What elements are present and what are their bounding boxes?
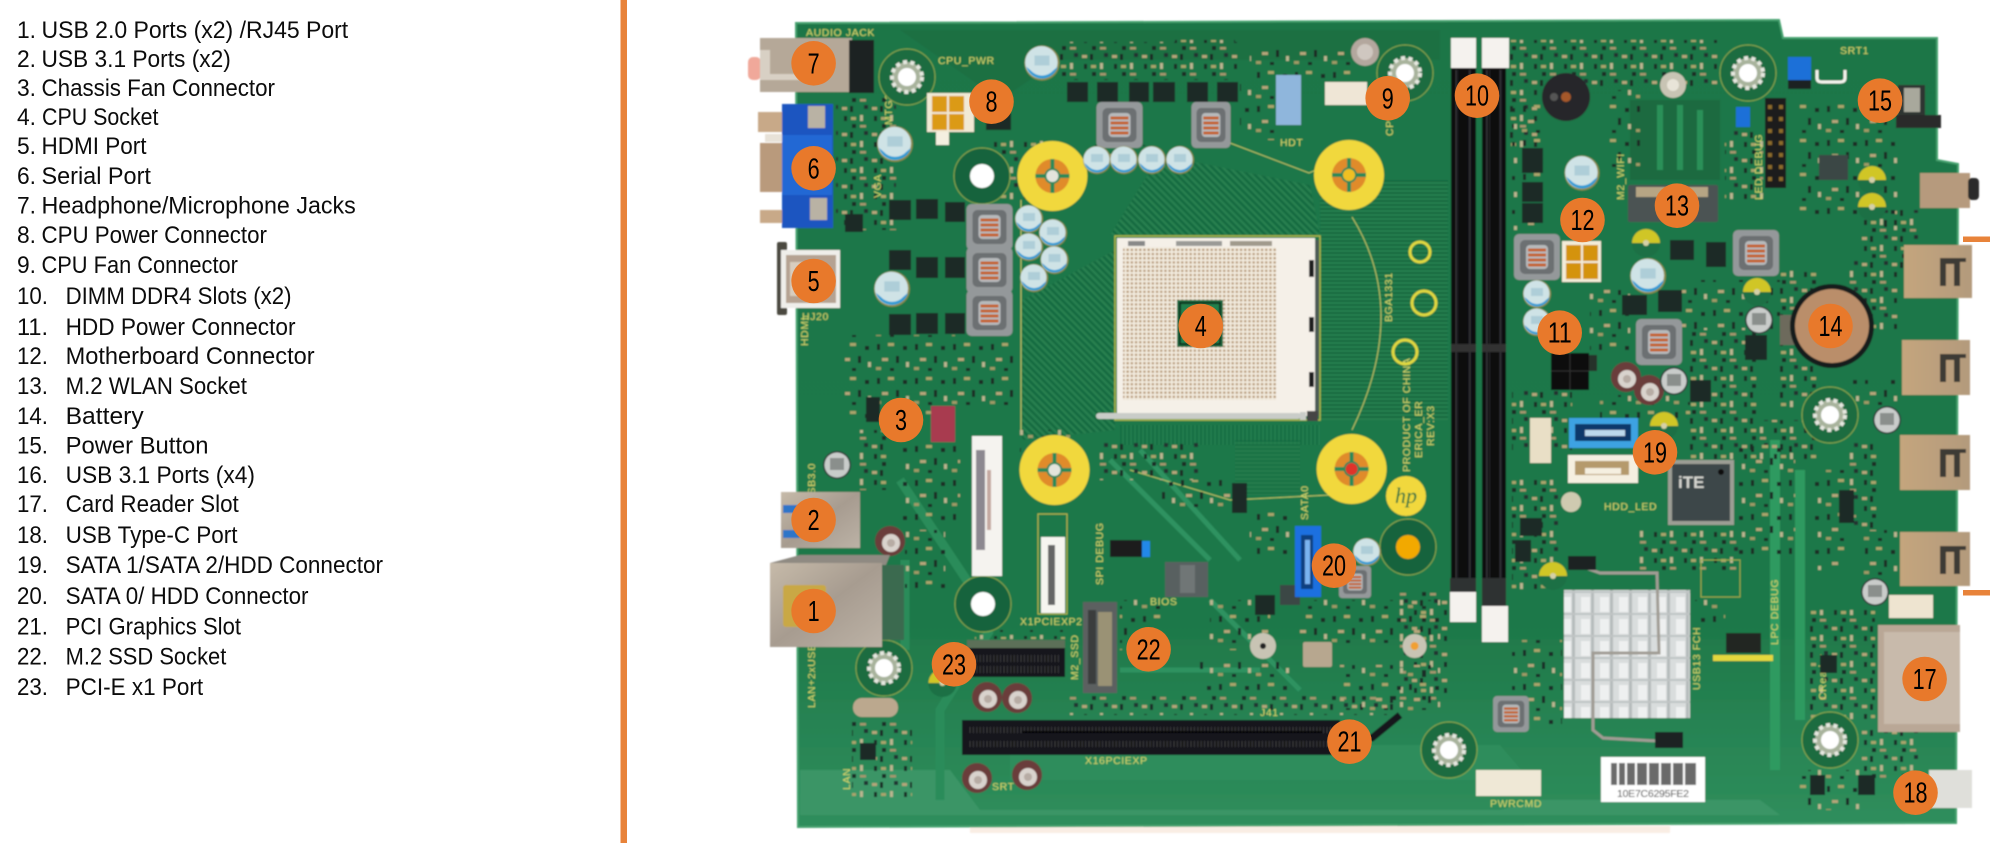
marker 9: 9 <box>1382 83 1394 115</box>
marker 9 <box>1365 76 1410 121</box>
silkscreen labels: HJ20 <box>802 311 829 323</box>
component 5 HDMI port <box>777 242 840 315</box>
silkscreen labels: HDMI <box>799 317 811 346</box>
marker 13: 13 <box>1665 191 1689 223</box>
marker 8: 8 <box>986 87 998 119</box>
marker 17: 17 <box>1913 664 1937 696</box>
marker 2 <box>791 498 836 542</box>
silkscreen labels: J41 <box>1260 707 1279 719</box>
list item 15: Power Button <box>66 432 208 460</box>
silkscreen labels: CPU_PWR <box>938 55 995 67</box>
PCB copper regions and traces <box>800 30 1800 815</box>
list item 16: USB 3.1 Ports (x4) <box>66 462 255 489</box>
component 12 motherboard connector <box>1562 241 1601 282</box>
marker 12 <box>1560 198 1605 242</box>
mounting holes <box>856 45 1858 778</box>
MAC barcode label: 10E7C6295FE2 <box>1617 788 1689 800</box>
marker 10 <box>1455 73 1499 118</box>
silkscreen labels: LAN <box>841 768 853 790</box>
list item 14: 14. <box>17 403 48 430</box>
silkscreen labels: PWRCMD <box>1490 798 1542 810</box>
marker 5: 5 <box>808 266 820 298</box>
marker 18: 18 <box>1904 778 1928 810</box>
component 3 chassis fan connector <box>931 406 955 442</box>
panel: numbered component list <box>17 17 383 701</box>
small surface-mount components <box>836 40 1920 800</box>
PCB <box>796 20 1958 827</box>
silkscreen labels: LED DEBUG <box>1753 134 1765 200</box>
marker 3 <box>879 398 923 442</box>
silkscreen labels: M2_SSD <box>1069 634 1081 680</box>
component 10 DIMM DDR4 slots <box>1450 38 1509 642</box>
list item 21: 21. <box>17 614 48 640</box>
marker 11: 11 <box>1548 318 1572 350</box>
list item 4: 4. <box>17 104 36 131</box>
cream pad near HDD LED <box>1561 492 1581 512</box>
list item 17: Card Reader Slot <box>66 491 239 518</box>
tan inductor <box>1303 642 1332 667</box>
silkscreen labels: CPU <box>1384 112 1396 136</box>
revision label <box>1038 514 1067 614</box>
marker 13 <box>1655 183 1699 228</box>
marker 1 <box>791 589 836 633</box>
list item 1: 1. <box>17 17 36 44</box>
ITE super IO chip: iTE <box>1678 473 1704 492</box>
marker 23 <box>932 642 976 687</box>
silkscreen labels: ERICA_ER <box>1413 401 1425 458</box>
power mosfet chips <box>845 82 1875 795</box>
silkscreen labels: PRODUCT OF CHINA <box>1401 358 1413 472</box>
marker 4: 4 <box>1195 311 1207 343</box>
silkscreen logos: hp <box>1395 483 1417 508</box>
BIOS chip <box>1165 562 1208 597</box>
silkscreen labels <box>799 27 1869 810</box>
PWRCMD connector <box>1476 770 1541 796</box>
component 9 CPU fan connector <box>1325 82 1367 105</box>
list item 11: HDD Power Connector <box>66 314 296 341</box>
list item 12: 12. <box>17 343 48 370</box>
numbered orange markers <box>791 41 1947 815</box>
HDT debug header <box>1276 75 1301 125</box>
marker 15 <box>1858 78 1902 123</box>
component 23 PCIe x1 slot <box>967 640 1065 677</box>
component 11 HDD power connector <box>1551 353 1597 390</box>
list item 5: 5. <box>17 133 36 160</box>
list item 10: DIMM DDR4 Slots (x2) <box>66 283 291 310</box>
marker 20 <box>1312 543 1356 588</box>
marker 14: 14 <box>1818 311 1842 343</box>
board shadow <box>970 826 1670 833</box>
buzzer <box>1542 73 1590 121</box>
silkscreen labels: SATA0 <box>1299 485 1311 520</box>
crystal <box>853 698 898 717</box>
marker 8 <box>969 79 1014 124</box>
marker 18 <box>1893 770 1938 815</box>
list item 7: Headphone/Microphone Jacks <box>42 192 356 220</box>
list item 9: CPU Fan Connector <box>42 252 238 279</box>
marker 7 <box>791 41 836 86</box>
list item 4: CPU Socket <box>42 104 159 131</box>
list item 15: 15. <box>17 432 48 460</box>
silkscreen labels: MTG2 <box>883 93 895 125</box>
list item 11: 11. <box>17 314 48 341</box>
component 19 SATA connectors <box>1568 418 1638 483</box>
marker 19 <box>1633 430 1677 475</box>
silkscreen labels: 2xUSB3.0 <box>806 463 818 515</box>
list item 2: USB 3.1 Ports (x2) <box>42 46 231 73</box>
list item 19: SATA 1/SATA 2/HDD Connector <box>66 552 383 579</box>
component 6 blue VGA serial port <box>758 104 833 228</box>
list item 1: USB 2.0 Ports (x2) /RJ45 Port <box>42 17 349 44</box>
half pads <box>928 166 1886 697</box>
marker 1: 1 <box>808 596 820 628</box>
marker 5 <box>791 259 836 303</box>
component 8 CPU power connector <box>927 93 974 145</box>
list item 6: Serial Port <box>42 163 151 190</box>
silkscreen labels: SRT1 <box>1840 45 1869 57</box>
ITE super IO chip <box>1668 460 1734 525</box>
marker 6 <box>791 146 836 191</box>
marker 19: 19 <box>1643 437 1667 469</box>
marker 20: 20 <box>1322 551 1346 583</box>
inductors <box>966 102 1779 732</box>
list item 14: Battery <box>66 403 144 430</box>
list item 23: 23. <box>17 674 48 701</box>
list item 5: HDMI Port <box>42 133 147 160</box>
list item 13: 13. <box>17 373 48 400</box>
marker 7: 7 <box>808 48 820 80</box>
component 1 RJ45 and USB stack <box>770 555 904 647</box>
list item 6: 6. <box>17 163 36 190</box>
list item 19: 19. <box>17 552 48 579</box>
marker 21: 21 <box>1338 727 1362 759</box>
list item 7: 7. <box>17 192 36 220</box>
silkscreen labels: CReader <box>1817 654 1829 700</box>
silkscreen labels: X1PCIEXP2 <box>1020 616 1083 628</box>
component 21 PCIe x16 slot <box>962 715 1400 755</box>
marker 22: 22 <box>1137 634 1161 666</box>
silkscreen labels: BIOS <box>1150 596 1178 608</box>
silkscreen labels: SPI DEBUG <box>1094 522 1106 585</box>
yellow CPU cooler pads <box>1017 140 1387 505</box>
marker 2: 2 <box>808 505 820 537</box>
serial number label <box>972 436 1002 576</box>
list item 22: 22. <box>17 644 48 670</box>
list item 14 <box>17 403 144 430</box>
component 22 M.2 SSD socket <box>1083 602 1117 693</box>
silkscreen labels: VGA <box>872 174 884 198</box>
rear audio jack <box>1920 173 1979 208</box>
marker 14 <box>1808 304 1853 348</box>
component 7 audio jack <box>748 38 874 93</box>
marker 23: 23 <box>942 649 966 681</box>
component 13 M.2 WLAN socket <box>1628 185 1718 222</box>
list item 23: PCI-E x1 Port <box>66 674 203 701</box>
silkscreen labels: HDD_LED <box>1604 501 1657 513</box>
silkscreen labels: LAN+2xUSB <box>806 643 818 708</box>
MAC barcode label <box>1601 757 1705 802</box>
list item 8: 8. <box>17 222 36 249</box>
electrolytic capacitors <box>823 38 1901 793</box>
silkscreen labels: X16PCIEXP <box>1085 755 1148 767</box>
list item 22: M.2 SSD Socket <box>66 644 227 670</box>
silkscreen labels: USB13 FCH <box>1691 627 1703 690</box>
panel: motherboard photo illustration <box>748 20 1990 833</box>
list item 16: 16. <box>17 462 48 489</box>
component 17 card reader slot <box>1878 625 1960 732</box>
marker 12: 12 <box>1570 205 1594 237</box>
list item 20: SATA 0/ HDD Connector <box>66 583 309 610</box>
marker 21 <box>1327 719 1372 764</box>
list item 9: 9. <box>17 252 36 279</box>
component 4 CPU socket <box>1096 236 1320 421</box>
FFC connector and yellow bar <box>1701 560 1773 661</box>
silkscreen labels: SRT <box>992 781 1015 793</box>
marker 4 <box>1178 304 1223 348</box>
list item 3: 3. <box>17 75 36 102</box>
silkscreen labels: M2_WIFI <box>1615 153 1627 200</box>
component 15 power button <box>1896 85 1941 128</box>
list item 8: CPU Power Connector <box>42 222 267 249</box>
sparser surface-mount components <box>845 50 1900 810</box>
silkscreen labels: BGA1331 <box>1383 272 1395 322</box>
marker 3: 3 <box>895 405 907 437</box>
list item 18: 18. <box>17 522 48 549</box>
list item 10: 10. <box>17 283 48 310</box>
list item 21: PCI Graphics Slot <box>66 614 241 640</box>
component 18 USB Type-C port <box>1929 770 1972 808</box>
jumpers and LED debug header <box>1736 57 1845 188</box>
silkscreen logos <box>1386 242 1436 516</box>
orange vertical divider <box>620 0 627 843</box>
orange callout ticks for USB ports <box>1963 236 1990 596</box>
list item 18: USB Type-C Port <box>66 522 238 549</box>
silkscreen labels: HDT <box>1280 137 1303 149</box>
SPI debug header <box>1110 540 1150 557</box>
marker 11 <box>1537 310 1582 355</box>
marker 15: 15 <box>1868 86 1892 118</box>
small white header <box>1530 418 1551 463</box>
component 2 USB 3.1 ports <box>781 492 860 548</box>
board and mounted components <box>748 20 1979 833</box>
component 14 battery <box>1780 284 1874 368</box>
component 16 USB 3.1 ports <box>1900 245 1972 586</box>
rear white connector P11 <box>1889 595 1933 618</box>
list item 12: Motherboard Connector <box>66 343 315 370</box>
list item 20: 20. <box>17 583 48 610</box>
chipset heatsink <box>1564 556 1690 748</box>
component 20 SATA 0 connector <box>1295 526 1321 597</box>
silkscreen labels: REV:X3 <box>1425 405 1437 446</box>
marker 10: 10 <box>1465 81 1489 113</box>
list item 17: 17. <box>17 491 48 518</box>
marker 17 <box>1902 657 1947 701</box>
list item 3: Chassis Fan Connector <box>42 75 275 102</box>
marker 6: 6 <box>808 153 820 185</box>
marker 22 <box>1126 627 1171 672</box>
list item 2: 2. <box>17 46 36 73</box>
list item 13: M.2 WLAN Socket <box>66 373 247 400</box>
silkscreen labels: AUDIO JACK <box>806 27 875 39</box>
silkscreen labels: LPC DEBUG <box>1769 579 1781 645</box>
